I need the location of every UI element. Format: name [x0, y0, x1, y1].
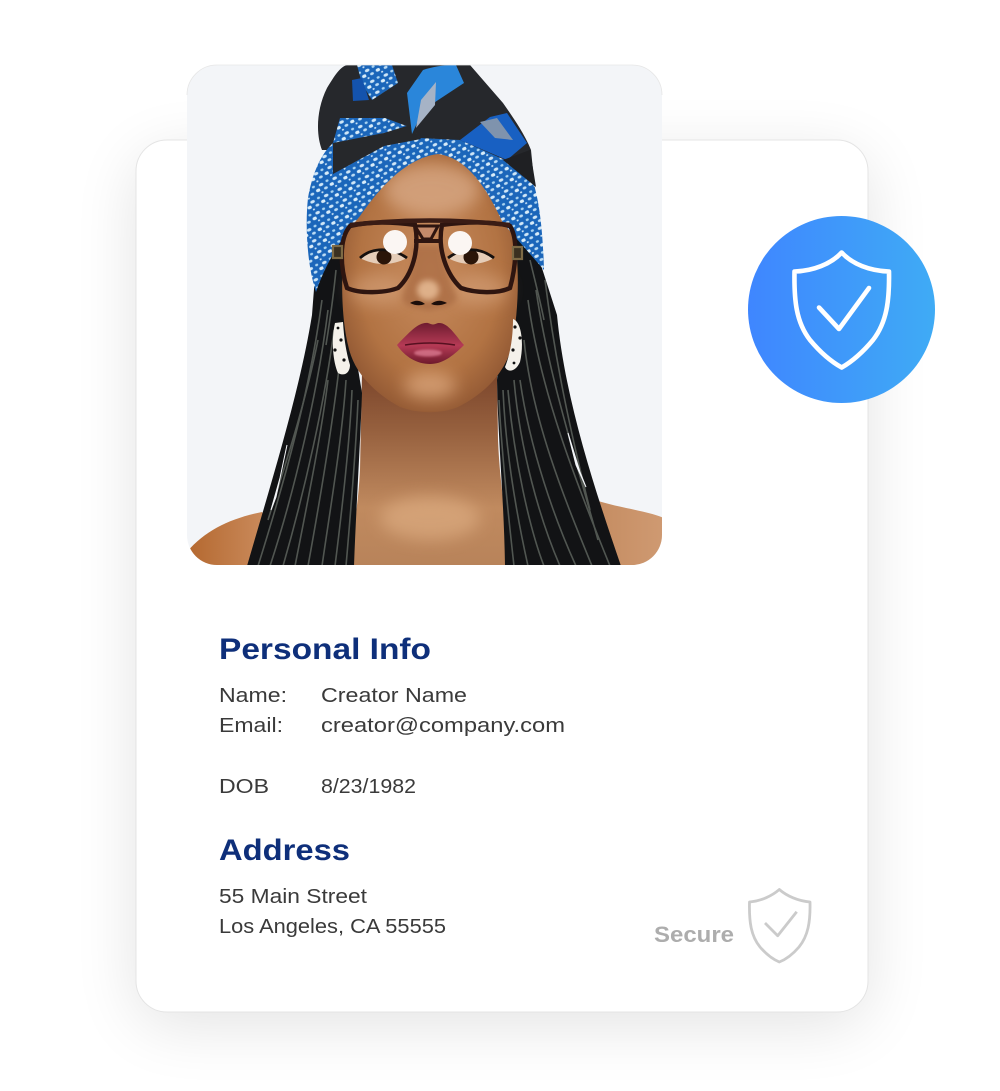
- turban: grey panel: [480, 118, 513, 140]
- card shadow: [136, 155, 868, 1025]
- text block: personal details: creator@company.com: [321, 714, 565, 737]
- left shoulder: [190, 512, 262, 565]
- text block: address: [219, 885, 446, 938]
- text block: personal details: Name:: [219, 684, 287, 707]
- turban: dark fold: [333, 125, 421, 174]
- icon: small grey shield: [749, 890, 810, 962]
- lips: [397, 323, 464, 364]
- text block: personal details: Email:: [219, 714, 283, 737]
- chin highlight: [404, 372, 456, 398]
- turban: main speckled band: [307, 118, 544, 292]
- portrait photo: [187, 65, 664, 566]
- badge: blue shield circle: [748, 216, 935, 403]
- glasses: [333, 220, 522, 292]
- turban: dark silhouette: [318, 65, 535, 190]
- right shoulder: [600, 502, 662, 565]
- text block: personal details: [219, 684, 565, 798]
- heading: personal info: Personal Info: [219, 633, 431, 666]
- gap between left locks: [271, 445, 287, 510]
- turban: blue patch: [352, 78, 369, 101]
- chest highlight: [380, 496, 480, 540]
- circle background: [748, 216, 935, 403]
- earring right: [505, 319, 522, 371]
- turban: grey scarf detail: [416, 82, 436, 128]
- text block: address: Los Angeles, CA 55555: [219, 915, 446, 938]
- neck and chest: [354, 375, 505, 565]
- gap between right locks: [568, 433, 586, 487]
- lens glare right: [448, 231, 472, 255]
- hair: right locks: [497, 230, 621, 566]
- text block: personal details: 8/23/1982: [321, 775, 416, 798]
- icon: check mark: [819, 288, 869, 329]
- eyes: [360, 250, 494, 264]
- face: [342, 153, 518, 412]
- earring left: [333, 322, 350, 374]
- turban: blue scarf: [407, 65, 464, 134]
- text block: personal details: Creator Name: [321, 684, 467, 707]
- heading: address: Address: [219, 834, 350, 867]
- icon: shield outline: [794, 252, 889, 368]
- turban: right blue scarf: [460, 113, 527, 160]
- turban: speckled top: [357, 65, 398, 100]
- turban: dark tail: [503, 150, 536, 187]
- hair: left locks: [247, 240, 362, 566]
- photo top outline: [187, 65, 662, 95]
- nose: [402, 245, 457, 311]
- photo backdrop: [187, 65, 662, 565]
- text block: address: 55 Main Street: [219, 885, 367, 908]
- panel: id card: [136, 140, 868, 1012]
- lens glare left: [383, 230, 407, 254]
- secure label: Secure: [654, 922, 734, 947]
- text block: personal details: DOB: [219, 775, 269, 798]
- forehead highlight: [384, 164, 480, 216]
- cheek highlights: [350, 274, 406, 306]
